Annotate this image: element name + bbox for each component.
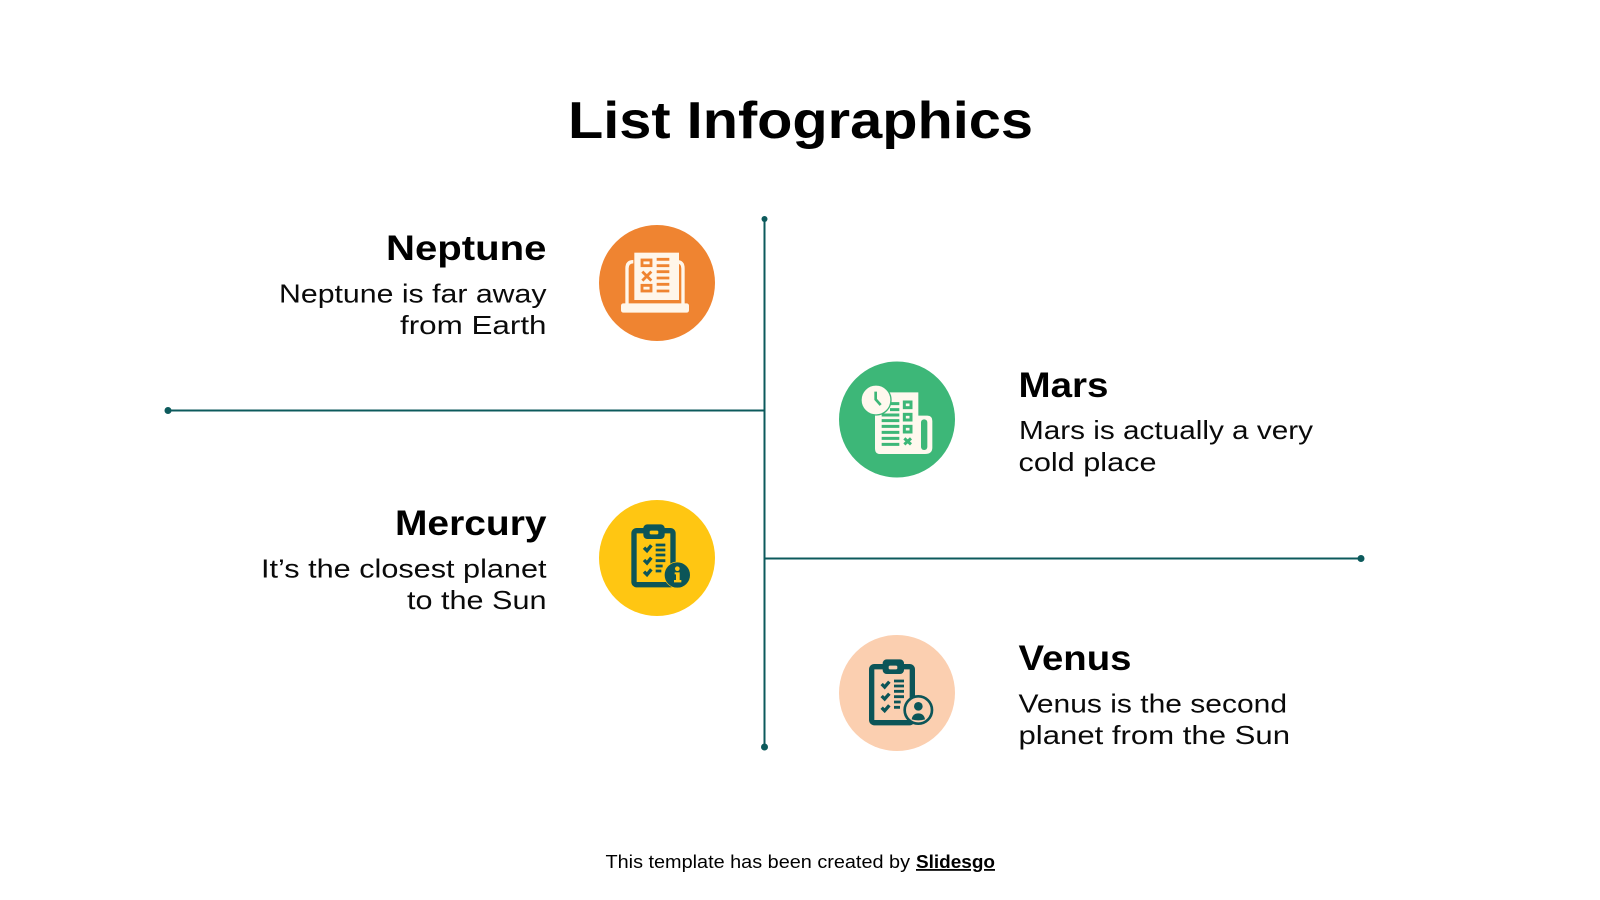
timeline axes <box>164 216 1364 750</box>
Mars heading: Mars <box>1018 366 1108 405</box>
Mars description <box>1018 415 1313 477</box>
Mercury description <box>261 554 547 615</box>
title: List Infographics <box>568 92 1033 150</box>
Mars description: cold place <box>1018 447 1156 477</box>
Mercury description: to the Sun <box>407 585 546 615</box>
panel: Mercury <box>261 500 715 616</box>
Venus description <box>1018 688 1290 750</box>
Venus heading: Venus <box>1018 639 1132 678</box>
footer credit: This template has been created by <box>606 852 910 872</box>
icon: clipboard with info badge on yellow circle <box>599 500 715 616</box>
panel: Mars <box>839 362 1313 478</box>
Venus description: planet from the Sun <box>1018 720 1290 750</box>
Neptune description: Neptune is far away <box>279 278 546 308</box>
Neptune description <box>279 278 546 340</box>
panel: Venus <box>839 635 1290 751</box>
Mars description: Mars is actually a very <box>1019 415 1313 445</box>
Neptune description: from Earth <box>400 310 546 340</box>
Neptune heading: Neptune <box>386 229 546 268</box>
icon: schedule document on green circle <box>839 362 955 478</box>
icon: clipboard with user badge on peach circle <box>839 635 955 751</box>
footer credit: Slidesgo <box>916 852 995 872</box>
Mercury description: It’s the closest planet <box>261 554 547 584</box>
panel: Neptune <box>279 225 715 341</box>
Venus description: Venus is the second <box>1018 688 1287 718</box>
icon: laptop checklist on orange circle <box>599 225 715 341</box>
Mercury heading: Mercury <box>395 504 547 543</box>
